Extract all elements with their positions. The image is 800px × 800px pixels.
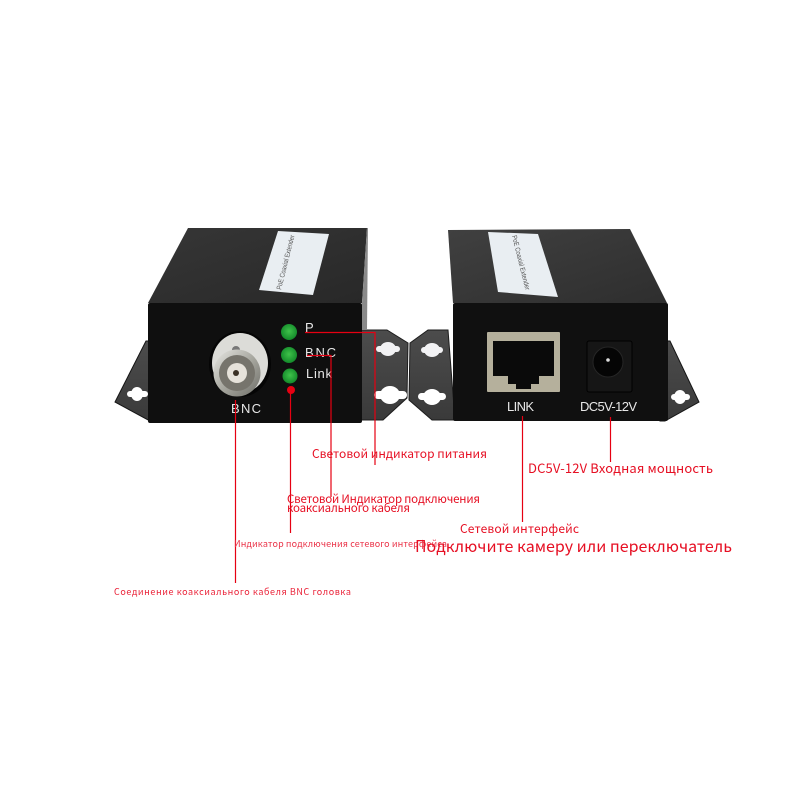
right unit label sticker [488,232,558,297]
device: left unit (BNC side) [115,228,408,423]
left unit top cover [148,228,367,303]
device: right unit (RJ45 side) [409,229,699,421]
leader line: BNC connector [234,400,236,583]
caption: power indicator: Световой индикатор питания [312,445,487,462]
right unit mounting flange, right [660,341,699,421]
DC power jack [587,341,632,392]
BNC port label: BNC [231,401,261,416]
right unit label sticker: PoE Coaxial Extender [510,235,531,291]
LED: Link [282,368,298,384]
RJ45 network port [487,332,560,392]
right unit top cover [448,229,667,303]
LINK port label: LINK [507,399,534,414]
leader line: DC jack [610,417,612,462]
left unit front panel [148,303,362,423]
left unit label sticker [259,231,329,295]
left unit label sticker: PoE Coaxial Extender [276,234,297,290]
caption: BNC indicator [287,491,480,516]
caption: connect camera or switch: Подключите камеру или переключатель [415,533,732,557]
right unit front panel [453,303,668,421]
right unit mounting flange, centre [409,330,455,420]
LED: BNC [281,347,297,363]
BNC connector [209,331,271,397]
left unit side edge [362,228,368,330]
caption: BNC connector: Соединение коаксиального кабеля BNC головка [114,585,351,598]
leader line: BNC indicator [307,356,331,497]
leader line: link indicator [287,386,295,533]
left unit mounting flange, left [115,341,156,421]
leader line: network port [522,416,524,522]
LED: power [281,324,297,340]
LED label P: P [305,320,314,335]
caption: network interface: Сетевой интерфейс [460,520,579,537]
left unit mounting flange, centre [360,330,408,420]
LED label BNC: BNC [305,345,336,360]
caption: network port indicator: Индикатор подключения сетевого интерфейса [234,537,447,550]
caption: DC input power: DC5V-12V Входная мощность [528,458,713,477]
LED label Link: Link [306,366,332,381]
caption: BNC indicator: Световой Индикатор подключения [287,491,480,507]
leader line: power indicator [305,332,375,465]
DC port label: DC5V-12V [580,399,637,414]
caption: BNC indicator: коаксиального кабеля [287,500,410,516]
